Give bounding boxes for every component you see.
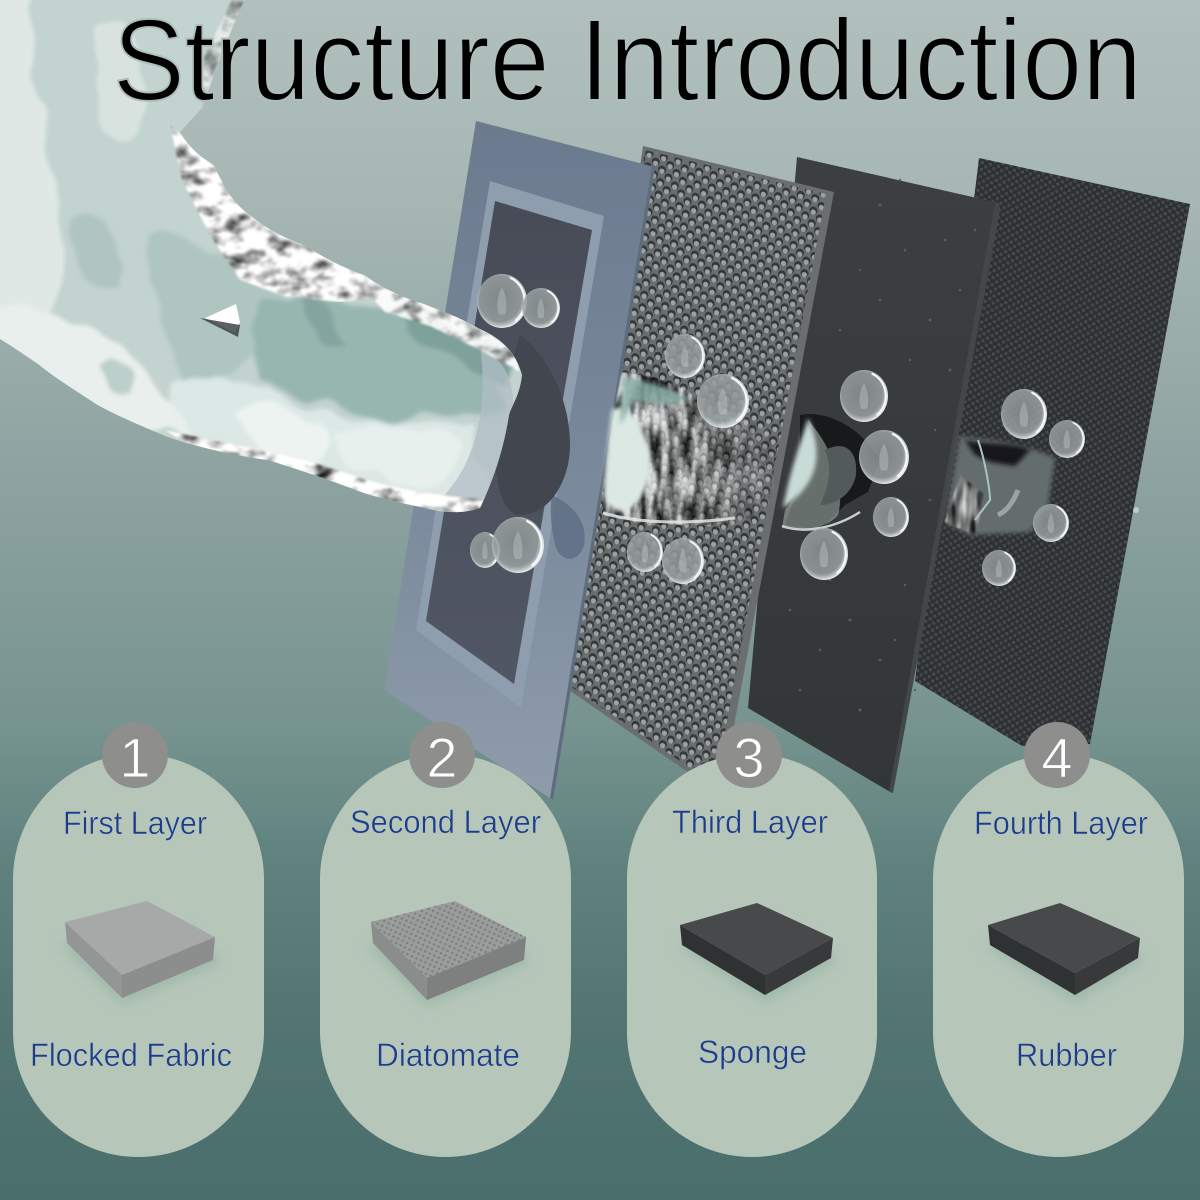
panel: fourth layer rubber sheet — [915, 158, 1190, 746]
water stream through second layer — [603, 372, 775, 525]
brick: flocked fabric sample — [60, 901, 222, 1004]
label: Fourth Layer: Fourth Layer — [974, 805, 1148, 841]
label: First Layer: First Layer — [63, 805, 207, 841]
panel: fourth layer card — [933, 754, 1184, 1157]
label: Rubber: Rubber — [1016, 1037, 1117, 1073]
label: Sponge: Sponge — [698, 1034, 807, 1070]
number badge 4 — [1024, 722, 1090, 789]
number badge 2 — [409, 722, 475, 789]
brick: diatomate sample — [366, 901, 532, 1006]
panel: third layer sponge sheet — [748, 157, 1000, 793]
brick: sponge sample — [676, 903, 838, 1003]
panel: third layer card — [627, 754, 877, 1157]
water droplets — [470, 274, 1085, 586]
panel: second layer diatomate perforated sheet — [566, 146, 834, 795]
water stream through fourth layer — [945, 436, 1055, 535]
panel: first layer flocked fabric sheet — [384, 121, 655, 800]
number badge 3: 3 — [733, 726, 765, 789]
label: Flocked Fabric: Flocked Fabric — [30, 1037, 232, 1073]
brick: rubber sample — [984, 903, 1145, 1003]
water stream through third layer — [782, 414, 880, 530]
panel: second layer card — [320, 754, 571, 1157]
number badge 1: 1 — [119, 726, 151, 789]
dark hole in first layer — [495, 335, 570, 515]
water stream main body — [0, 0, 530, 520]
number badge 4: 4 — [1041, 726, 1073, 789]
label: Third Layer: Third Layer — [672, 804, 828, 840]
label: Second Layer: Second Layer — [350, 804, 541, 840]
number badge 2: 2 — [426, 726, 458, 789]
panel: first layer card — [13, 754, 264, 1157]
number badge 3 — [716, 722, 782, 789]
number badge 1 — [102, 722, 168, 789]
label: Diatomate: Diatomate — [376, 1037, 520, 1073]
